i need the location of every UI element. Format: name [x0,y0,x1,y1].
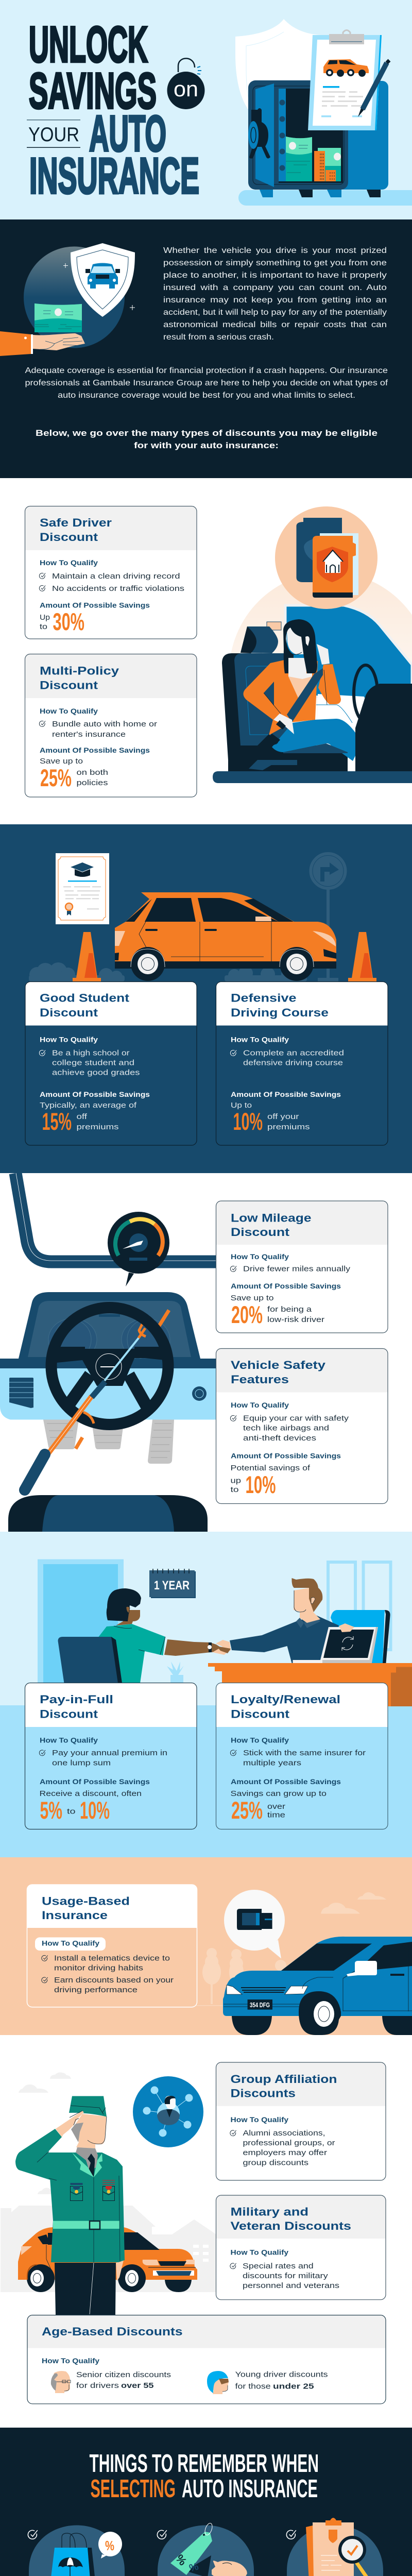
card: age-based discounts: Young driver discounts [235,2371,328,2379]
icon: senior driver face [51,2371,71,2393]
card: low mileage discount: 20% [231,1301,263,1328]
card: vehicle safety features: How To Qualify [231,1401,289,1409]
card: pay-in-full discount: How To Qualify [40,1736,98,1744]
card: low mileage discount: Discount [231,1226,290,1239]
card: military and veteran discounts: personnel and veterans [243,2282,339,2290]
card: good student discount: Discount [40,1006,98,1019]
card: vehicle safety features: Vehicle Safety [231,1359,326,1371]
tip: shop around [28,2526,125,2576]
text: intro paragraph: insured with a company you can count on. Auto [163,283,387,292]
card: vehicle safety features: 10% [245,1471,276,1498]
text: discounts lead-in [36,429,377,450]
icon: open padlock with the word on [167,58,205,109]
card: multi-policy discount: on both [76,769,108,777]
card: loyalty renewal discount: Loyalty/Renewal [231,1693,340,1706]
icon: young driver face [207,2371,229,2394]
card: safe driver discount: No accidents or traffic violations [52,585,184,593]
card: age-based discounts: over 55 [121,2382,153,2390]
card: pay-in-full discount: Pay-in-Full [40,1693,113,1706]
card: safe driver discount: Discount [40,531,98,544]
card: military and veteran discounts: Military and [231,2205,308,2218]
illustration: clouds and trees [196,1892,386,2006]
card: good student discount: Be a high school or [52,1049,130,1057]
card: military and veteran discounts: Special rates and [243,2262,314,2270]
card: usage-based insurance: driving performance [54,1986,138,1994]
card: usage-based insurance: Earn discounts based on your [54,1976,174,1985]
tip: combining discounts: % [188,2561,200,2574]
card: safe driver discount: to [40,623,47,631]
card: age-based discounts [27,2315,386,2404]
card: defensive driving course: off your [267,1113,299,1121]
card: usage-based insurance [27,1885,197,2007]
card: group affiliation discounts: Alumni associations, [243,2129,325,2138]
card: group affiliation discounts: Discounts [231,2087,296,2100]
card: good student discount: off [76,1113,88,1121]
tip: combining discounts: % [173,2552,190,2568]
card: military and veteran discounts: How To Qualify [231,2248,289,2257]
illustration: office handshake [38,1559,412,1706]
text: coverage paragraph [25,366,388,400]
card: multi-policy discount: How To Qualify [40,707,98,715]
card: defensive driving course: Driving Course [231,1006,329,1019]
card: good student discount: achieve good grades [52,1069,140,1077]
illustration: orange car between cones [73,892,376,981]
card: defensive driving course: Complete an accredited [243,1049,344,1057]
card: usage-based insurance: monitor driving habits [54,1964,143,1972]
card: loyalty renewal discount: time [267,1811,285,1820]
card: defensive driving course: How To Qualify [231,1036,289,1044]
card: usage-based insurance: Usage-Based [42,1895,130,1907]
text: discounts lead-in: for with your auto insurance: [134,441,279,450]
card: age-based discounts: Senior citizen discounts [76,2371,171,2379]
card: multi-policy discount: Amount Of Possible Savings [40,747,150,754]
card: loyalty renewal discount: 25% [231,1797,263,1824]
card: good student discount: Amount Of Possible Savings [40,1091,150,1098]
illustration: saluting veteran [15,2096,125,2315]
heading: things to remember: AUTO INSURANCE [182,2475,318,2503]
card: vehicle safety features: tech like airbags and [243,1424,329,1432]
card: loyalty renewal discount: Savings can grow up to [231,1790,327,1798]
illustration: blue car with telematics bubble: 354 DFG [250,2001,270,2009]
heading: things to remember [90,2450,319,2503]
illustration: safe, shield and policy clipboard [235,19,412,206]
card: vehicle safety features: Potential savings of [231,1464,311,1472]
card: military and veteran discounts [216,2195,386,2300]
illustration: hand holding money and insured car shield [0,243,135,356]
card: pay-in-full discount: one lump sum [52,1759,111,1767]
card: usage-based insurance: How To Qualify [42,1939,100,1947]
card: vehicle safety features [216,1349,388,1503]
panel: things to remember [0,2428,412,2576]
card: low mileage discount [216,1201,388,1333]
card: group affiliation discounts: Group Affiliation [231,2073,337,2086]
card: multi-policy discount: Multi-Policy [40,665,119,677]
illustration: road sign and clouds [29,854,345,983]
card: defensive driving course: premiums [267,1123,310,1131]
text: intro paragraph: accident, but it will help to pay for any of the potentially [163,308,387,317]
card: usage-based insurance: Install a telematics device to [54,1955,170,1963]
text: intro paragraph [163,246,387,342]
card: good student discount: Typically, an average of [40,1101,137,1110]
text: discounts lead-in: Below, we go over the many types of discounts you may be eligible [36,429,377,438]
card: group affiliation discounts: group discounts [243,2159,308,2167]
card: low mileage discount: for being a [267,1306,312,1314]
panel: pay-in-full and loyalty [0,1532,412,1857]
card: loyalty renewal discount [216,1683,388,1829]
card: loyalty renewal discount: Amount Of Possible Savings [231,1778,341,1786]
card: good student discount: premiums [76,1123,118,1131]
card: defensive driving course: Defensive [231,991,297,1005]
icon: open padlock with the word on: on [174,77,198,101]
card: age-based discounts: Age-Based Discounts [42,2325,183,2338]
card: good student discount: Good Student [40,991,130,1005]
card: pay-in-full discount: Amount Of Possible Savings [40,1778,150,1786]
card: good student discount [25,982,197,1145]
card: pay-in-full discount: to [67,1807,75,1816]
card: safe driver discount: Amount Of Possible Savings [40,602,150,609]
card: loyalty renewal discount: How To Qualify [231,1736,289,1744]
card: pay-in-full discount: 5% [40,1797,62,1824]
card: multi-policy discount: renter's insurance [52,731,126,739]
icon: group network [133,2076,203,2147]
card: loyalty renewal discount: Stick with the same insurer for [243,1749,366,1757]
card: age-based discounts: for those [235,2382,271,2391]
card: defensive driving course: Amount Of Possible Savings [231,1091,341,1098]
card: vehicle safety features: anti-theft devices [243,1434,316,1443]
card: defensive driving course: 10% [233,1108,263,1135]
card: safe driver discount: Up [40,614,50,622]
text: intro paragraph: possession or simply something to get you from one [163,259,387,267]
text: intro paragraph: result from a serious crash. [163,333,274,342]
card: age-based discounts: for drivers [76,2382,119,2390]
illustration: blue car with telematics bubble [223,1890,412,2035]
text: coverage paragraph: Adequate coverage is essential for financial protection if a crash happens. Our insurance [25,366,388,375]
panel: low mileage and vehicle safety [0,1173,388,1532]
illustration: office handshake: 1 YEAR [154,1579,190,1592]
panel: group affiliation, military and age-based [1,2062,386,2404]
card: safe driver discount [25,506,197,639]
card: vehicle safety features: to [231,1486,239,1494]
card: age-based discounts: How To Qualify [42,2357,100,2365]
card: defensive driving course [216,982,388,1145]
card: good student discount: How To Qualify [40,1036,98,1044]
text: intro paragraph: insurance may not keep you from getting into an [163,296,387,304]
card: defensive driving course: defensive driving course [243,1059,343,1067]
card: pay-in-full discount [25,1683,197,1829]
illustration: woman buckling seat belt with policy folders [213,506,412,783]
text: coverage paragraph: professionals at Gambale Insurance Group are here to help you decide on what types of [25,379,388,387]
card: loyalty renewal discount: Discount [231,1707,290,1721]
panel: good student and defensive driving [0,824,412,1173]
card: age-based discounts: under 25 [273,2382,314,2391]
card: multi-policy discount: Discount [40,679,98,691]
panel: introduction [0,219,412,478]
card: multi-policy discount: Save up to [40,757,83,766]
card: safe driver discount: Safe Driver [40,516,112,529]
card: low mileage discount: Low Mileage [231,1212,311,1224]
card: vehicle safety features: Equip your car with safety [243,1415,349,1423]
card: loyalty renewal discount: multiple years [243,1759,301,1767]
card: multi-policy discount: 25% [40,764,72,791]
text: intro paragraph: place to another, it is important to have it properly [163,271,387,280]
card: vehicle safety features: Features [231,1373,289,1386]
card: vehicle safety features: up [231,1477,241,1485]
title: unlock savings on your auto insurance: UNLOCK [29,16,148,73]
card: safe driver discount: 30% [53,608,84,635]
illustration: dashboard with locked steering wheel [0,1292,216,1532]
card: vehicle safety features: Amount Of Possible Savings [231,1452,341,1460]
card: multi-policy discount [25,654,197,797]
title: unlock savings on your auto insurance: YOUR [28,124,79,146]
card: low mileage discount: Drive fewer miles annually [243,1265,351,1274]
card: military and veteran discounts: discounts for military [243,2272,328,2280]
panel: hero [0,0,412,219]
title: unlock savings on your auto insurance: AUTO [89,105,166,162]
illustration: road line [15,1173,216,1262]
card: military and veteran discounts: Veteran Discounts [231,2219,351,2232]
card: low mileage discount: How To Qualify [231,1253,289,1261]
card: multi-policy discount: Bundle auto with home or [52,720,157,728]
tip: combining discounts [157,2522,254,2576]
card: multi-policy discount: policies [76,779,108,787]
text: intro paragraph: astronomical medical bills or repair costs that can [163,320,387,329]
title: unlock savings on your auto insurance: SAVINGS [29,62,157,119]
card: good student discount: college student and [52,1059,134,1067]
tip: shop around: % [105,2538,114,2553]
card: low mileage discount: low-risk driver [267,1316,324,1324]
card: safe driver discount: Maintain a clean driving record [52,572,180,581]
card: defensive driving course: Up to [231,1101,252,1110]
text: intro paragraph: Whether the vehicle you drive is your most prized [163,246,387,255]
tip: review your policy [286,2518,383,2576]
illustration: houses, clouds and orange car background [1,2072,216,2292]
text: coverage paragraph: auto insurance coverage would be best for you and what limits to select. [58,391,355,400]
card: group affiliation discounts [216,2062,386,2180]
illustration: speedometer [108,1212,169,1286]
card: pay-in-full discount: Pay your annual premium in [52,1749,167,1757]
illustration: graduation certificate [56,853,109,924]
card: safe driver discount: How To Qualify [40,559,98,567]
card: loyalty renewal discount: over [267,1803,285,1811]
card: group affiliation discounts: How To Qualify [231,2116,289,2124]
card: pay-in-full discount: 10% [80,1797,110,1824]
card: low mileage discount: Save up to [231,1294,274,1302]
panel: safe driver and multi-policy [25,506,412,797]
heading: things to remember: SELECTING [91,2475,176,2503]
card: pay-in-full discount: Discount [40,1707,98,1721]
card: good student discount: 15% [42,1108,72,1135]
title: unlock savings on your auto insurance [27,16,199,204]
card: usage-based insurance: Insurance [42,1909,108,1922]
card: low mileage discount: Amount Of Possible Savings [231,1282,341,1290]
panel: usage-based insurance [0,1857,412,2035]
card: pay-in-full discount: Receive a discount, often [39,1790,142,1798]
card: group affiliation discounts: professional groups, or [243,2139,335,2147]
title: unlock savings on your auto insurance: INSURANCE [29,147,199,204]
card: group affiliation discounts: employers may offer [243,2149,327,2157]
